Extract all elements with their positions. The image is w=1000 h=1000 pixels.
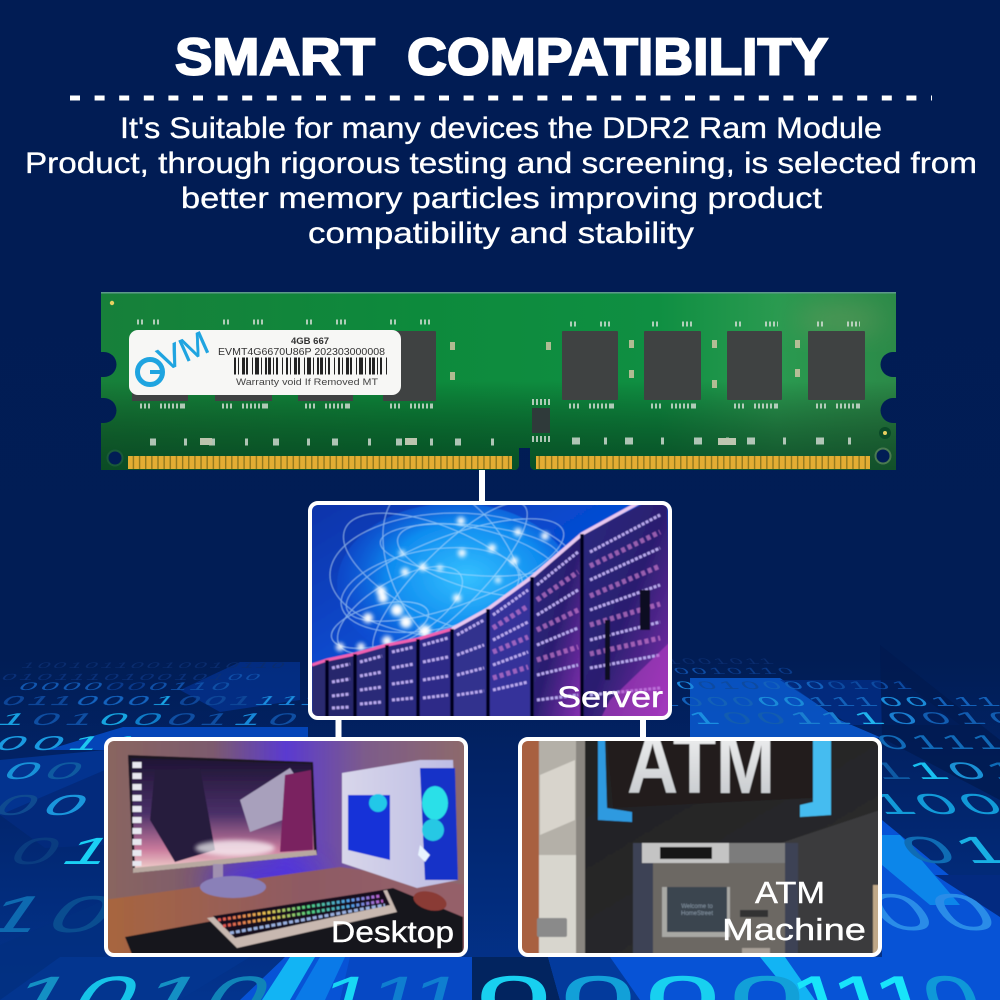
network globe bbox=[328, 505, 566, 654]
ATM machine bbox=[633, 843, 798, 957]
server racks bbox=[312, 492, 672, 720]
background with binary floor: 010111010010100 bbox=[0, 672, 268, 682]
mounting holes bbox=[108, 301, 891, 466]
background with binary floor: 0110001001111 bbox=[0, 694, 334, 708]
mousepad bbox=[125, 888, 463, 957]
title: SMART bbox=[175, 28, 375, 86]
DDR2 RAM module bbox=[101, 292, 896, 470]
description text: better memory particles improving product bbox=[181, 182, 823, 215]
title: COMPATIBILITY bbox=[407, 28, 828, 86]
description text: compatibility and stability bbox=[308, 217, 694, 250]
blue bracket right bbox=[800, 737, 831, 817]
background with binary floor: 00100000101 bbox=[672, 679, 920, 692]
background with binary floor: 101000110 bbox=[0, 709, 312, 729]
label: ATM Machine bbox=[722, 875, 866, 947]
barcode bbox=[234, 358, 387, 374]
description text: It's Suitable for many devices the DDR2 Ram Module bbox=[120, 112, 882, 145]
monitor bbox=[128, 755, 317, 873]
surface mount parts bbox=[137, 322, 860, 445]
ATM sign: ATM bbox=[627, 717, 775, 811]
memory chips right bbox=[532, 331, 865, 433]
contact pins left bbox=[128, 456, 512, 469]
background with binary floor: 0110010011001011 bbox=[524, 657, 780, 666]
description text: Product, through rigorous testing and screening, is selected from bbox=[25, 147, 977, 180]
background with binary floor: 0100110000010110 bbox=[513, 666, 801, 676]
logo EVM: VM bbox=[152, 323, 214, 378]
memory chips left bbox=[132, 331, 436, 401]
product sticker: 4GB 667 bbox=[291, 336, 329, 347]
product sticker: Warranty void If Removed MT bbox=[236, 377, 379, 387]
contact pins right bbox=[536, 456, 870, 469]
photo: desktop bbox=[104, 737, 468, 957]
label: Desktop: Desktop bbox=[331, 916, 454, 949]
ATM machine: Welcome to bbox=[681, 904, 713, 910]
label: ATM Machine: ATM bbox=[755, 875, 825, 910]
description text bbox=[25, 112, 977, 250]
photo: ATM bbox=[518, 717, 882, 957]
background with binary floor: 10010110010010110 bbox=[18, 661, 292, 670]
title bbox=[175, 28, 828, 86]
background with binary floor: 0000000110 bbox=[15, 680, 239, 693]
blue bracket left bbox=[598, 737, 632, 822]
logo EVM bbox=[138, 323, 214, 384]
keyboard bbox=[207, 890, 397, 948]
background with binary floor: 011 bbox=[0, 830, 187, 872]
label: Server: Server bbox=[557, 681, 663, 714]
mouse bbox=[412, 890, 447, 912]
product sticker: EVMT4G6670U86P 202303000008 bbox=[218, 346, 385, 358]
tower PC bbox=[342, 760, 458, 888]
label: ATM Machine: Machine bbox=[722, 912, 866, 947]
ATM machine: HomeStreet bbox=[681, 911, 713, 917]
product sticker bbox=[129, 323, 401, 395]
photo: server bbox=[308, 501, 672, 720]
connector lines bbox=[336, 470, 646, 740]
ATM sign bbox=[613, 741, 812, 808]
